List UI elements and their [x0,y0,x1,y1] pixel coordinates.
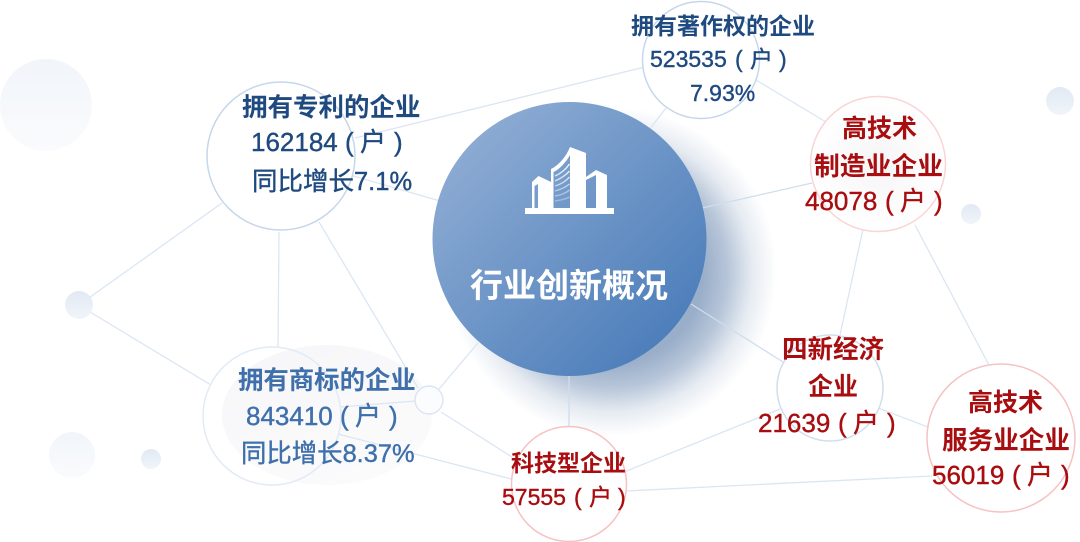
panel: high-tech manufacturing companies: ( [885,186,894,216]
panel: high-tech manufacturing companies: 制造业企业 [814,152,943,181]
panel: science and technology companies [502,426,626,542]
panel: high-tech manufacturing companies: 高技术 [842,115,917,143]
panel: patent companies: ) [394,127,403,157]
panel: copyright companies: 拥有著作权的企业 [631,13,815,39]
icon: buildings [525,147,614,214]
panel: four-new economy companies: 户 [853,408,879,438]
panel: high-tech manufacturing companies: ) [934,186,943,216]
panel: patent companies: 同比增长7.1% [252,168,412,196]
panel: patent companies: 162184 [251,127,338,157]
panel: copyright companies: ( [735,46,743,72]
background decorative dots [0,59,1074,485]
panel: trademark companies: 户 [355,401,381,431]
panel: patent companies: 户 [360,127,386,157]
panel: trademark companies: ( [340,401,349,431]
panel: copyright companies: ) [779,46,787,72]
panel: science and technology companies: 57555 [502,484,566,510]
panel: science and technology companies: ) [618,484,626,510]
node: small hollow circle [415,386,443,414]
panel: copyright companies [631,2,815,118]
panel: high-tech service companies: ( [1012,460,1021,490]
panel: high-tech service companies: ) [1061,460,1070,490]
panel: patent companies: ( [345,127,354,157]
panel: four-new economy companies: 四新经济 [782,336,885,364]
panel: high-tech service companies: 高技术 [968,389,1043,417]
panel: science and technology companies: ( [574,484,582,510]
panel: central circle [432,102,706,376]
panel: trademark companies: 同比增长8.37% [241,440,415,468]
central title: 行业创新概况 [470,267,668,304]
panel: high-tech service companies [927,364,1075,512]
panel: trademark companies: ) [389,401,398,431]
panel: science and technology companies: 科技型企业 [511,450,626,476]
panel: trademark companies: 拥有商标的企业 [238,367,416,395]
panel: high-tech manufacturing companies: 48078 [805,186,877,216]
panel: trademark companies: 843410 [246,401,333,431]
panel: high-tech manufacturing companies: 户 [900,186,926,216]
node: left small dot [65,291,93,319]
panel: four-new economy companies [758,335,896,441]
panel: four-new economy companies: 21639 [758,408,830,438]
panel: patent companies [207,82,421,230]
panel: science and technology companies: 户 [589,484,612,510]
panel: four-new economy companies: ) [887,408,896,438]
panel: copyright companies: 7.93% [690,80,755,106]
panel: copyright companies: 户 [750,46,773,72]
panel: high-tech service companies: 56019 [932,460,1004,490]
panel: high-tech service companies: 服务业企业 [942,426,1070,455]
central shadow [447,107,777,437]
network connection lines [79,67,990,491]
panel: high-tech manufacturing companies [805,96,946,232]
panel: trademark companies [203,347,416,485]
panel: four-new economy companies: ( [838,408,847,438]
panel: patent companies: 拥有专利的企业 [242,94,421,122]
panel: copyright companies: 523535 [650,46,727,72]
panel: high-tech service companies: 户 [1027,460,1053,490]
panel: four-new economy companies: 企业 [808,373,858,401]
